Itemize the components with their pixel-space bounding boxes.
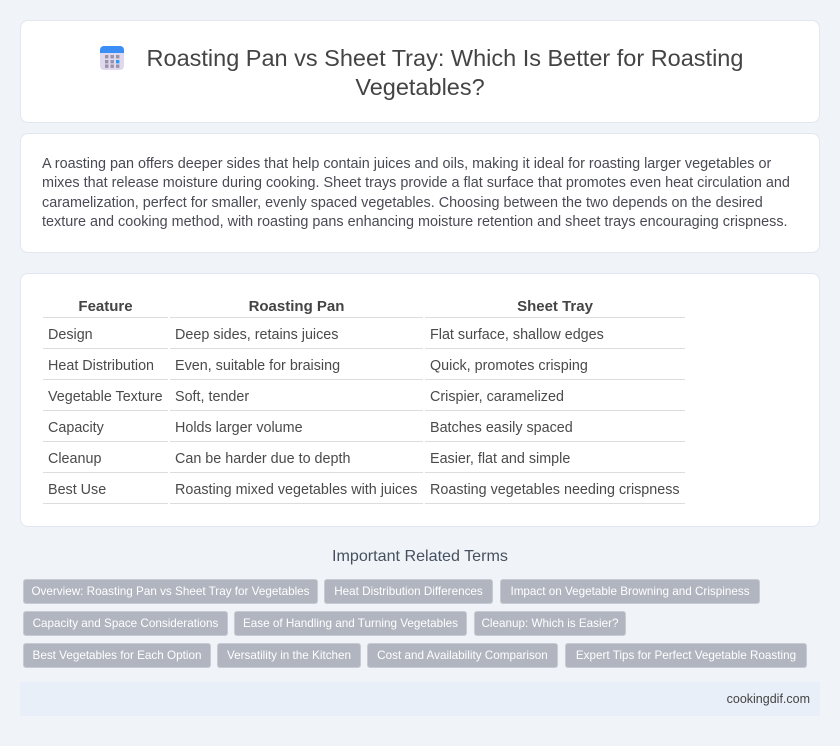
intro paragraph: caramelization, perfect for smaller, evenly spaced vegetables. Choosing between the two depends on the desired: [42, 195, 763, 211]
related terms tags: Versatility in the Kitchen: [227, 649, 351, 662]
footer bar: [20, 682, 820, 716]
intro paragraph: mixes that release moisture during cooking. Sheet trays provide a flat surface that promotes even heat circulation and: [42, 175, 790, 191]
title: Roasting Pan vs Sheet Tray: Which Is Better for Roasting: [147, 45, 743, 71]
comparison table: Deep sides, retains juices: [175, 327, 338, 343]
comparison table: Heat Distribution: [48, 358, 154, 374]
comparison table: Batches easily spaced: [430, 420, 573, 436]
related terms tags: Overview: Roasting Pan vs Sheet Tray for Vegetables: [31, 585, 310, 598]
intro paragraph: A roasting pan offers deeper sides that help contain juices and oils, making it ideal for roasting larger vegetables or: [42, 156, 771, 172]
source: cookingdif.com: [727, 692, 810, 706]
related terms tags: Impact on Vegetable Browning and Crispiness: [510, 585, 750, 598]
table header: Feature: [78, 298, 133, 315]
table header: Roasting Pan: [249, 298, 344, 315]
comparison table: Flat surface, shallow edges: [430, 327, 604, 343]
related terms tags: Cost and Availability Comparison: [377, 649, 548, 662]
table header: [43, 298, 685, 318]
related terms tags: Capacity and Space Considerations: [33, 617, 218, 630]
related terms heading: Important Related Terms: [332, 547, 508, 565]
intro paragraph: texture and cooking method, with roasting pans enhancing moisture retention and sheet trays encouraging crispness.: [42, 214, 788, 230]
comparison table: Can be harder due to depth: [175, 451, 350, 467]
comparison table: Even, suitable for braising: [175, 358, 340, 374]
related terms tags: Expert Tips for Perfect Vegetable Roasting: [576, 649, 796, 662]
comparison table: Quick, promotes crisping: [430, 358, 588, 374]
comparison table: Easier, flat and simple: [430, 451, 570, 467]
intro paragraph card: [20, 133, 820, 253]
comparison table: Holds larger volume: [175, 420, 303, 436]
comparison table: Roasting mixed vegetables with juices: [175, 482, 417, 498]
related terms tags: Heat Distribution Differences: [334, 585, 483, 598]
title: [147, 45, 743, 100]
comparison table: Design: [48, 327, 93, 343]
comparison table: [43, 298, 685, 504]
related terms tags: Best Vegetables for Each Option: [33, 649, 201, 662]
header card: [20, 20, 820, 123]
table header: Sheet Tray: [517, 298, 593, 315]
intro paragraph: [42, 156, 790, 230]
comparison table: Capacity: [48, 420, 104, 436]
comparison table: Crispier, caramelized: [430, 389, 564, 405]
related terms tags: Ease of Handling and Turning Vegetables: [243, 617, 458, 630]
comparison table: Roasting vegetables needing crispness: [430, 482, 680, 498]
related terms tags: Cleanup: Which is Easier?: [481, 617, 619, 630]
title: Vegetables?: [355, 74, 485, 100]
comparison table: Soft, tender: [175, 389, 249, 405]
comparison table: Cleanup: [48, 451, 101, 467]
comparison table: Vegetable Texture: [48, 389, 163, 405]
related terms tags: [23, 579, 807, 668]
icon: calendar: [100, 46, 124, 70]
table card: [20, 273, 820, 527]
comparison table: Best Use: [48, 482, 106, 498]
